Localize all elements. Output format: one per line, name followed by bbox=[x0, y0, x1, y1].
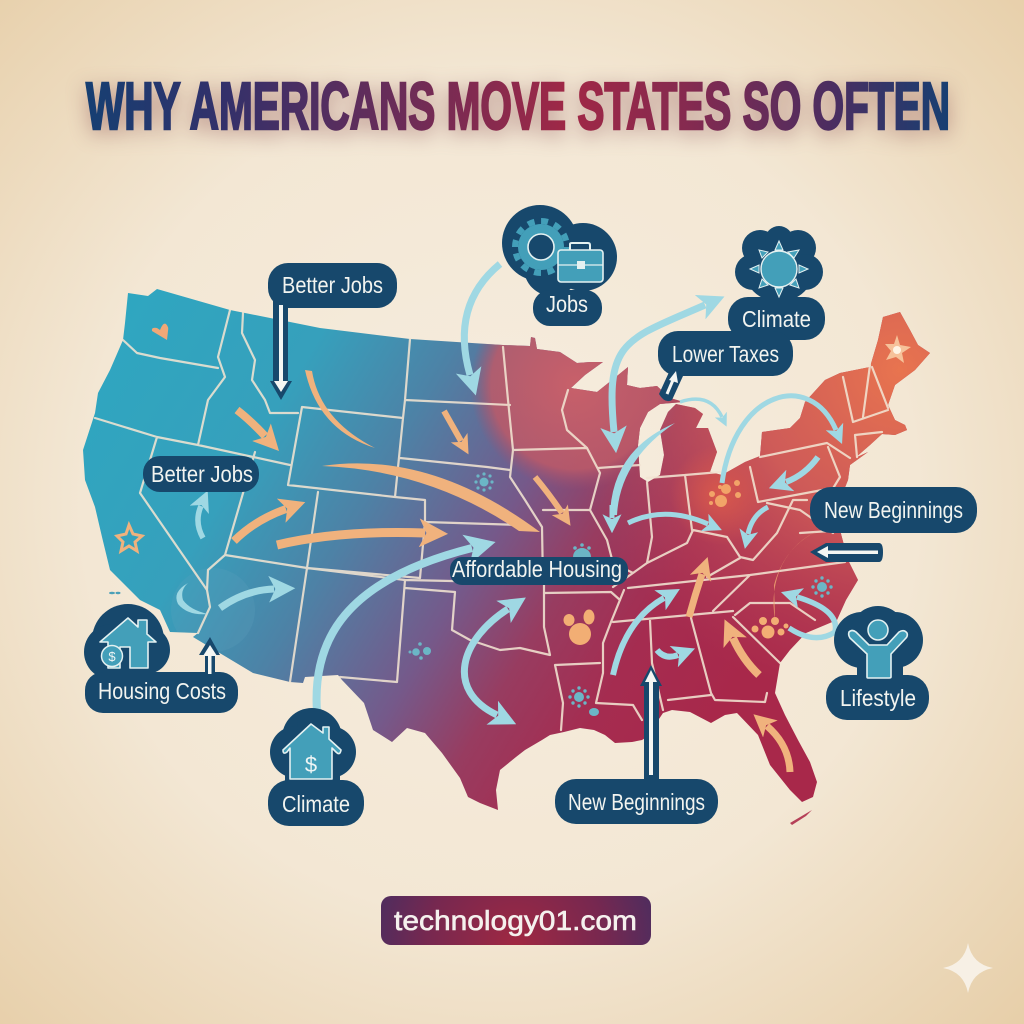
arrow: Midwest to Climate bbox=[612, 305, 705, 432]
callout: Better Jobs middle bbox=[143, 456, 259, 492]
arrow: South Dakota to Nebraska bbox=[444, 411, 461, 441]
callout: Climate top: Climate bbox=[742, 306, 811, 332]
Hawaii and Florida keys bbox=[109, 592, 812, 825]
callout: Better Jobs top: Better Jobs bbox=[282, 272, 383, 298]
footer website badge bbox=[381, 896, 651, 945]
teal flower: Nebraska bbox=[474, 472, 494, 492]
arrow: from Jobs icon bbox=[464, 264, 500, 375]
arrow: Florida bbox=[767, 726, 790, 772]
arrow: Idaho to Wyoming bbox=[237, 410, 265, 436]
arrow: Nevada up bbox=[198, 506, 203, 538]
callout: Housing Costs: Housing Costs bbox=[98, 678, 226, 704]
callout: New Beginnings bottom bbox=[555, 665, 718, 824]
icon: house with coin bbox=[100, 618, 156, 668]
arrow: Georgia bbox=[733, 638, 759, 675]
icon: house with dollar: $ bbox=[305, 752, 317, 777]
callout: Climate bottom: Climate bbox=[282, 791, 350, 817]
callout: Affordable Housing: Affordable Housing bbox=[452, 556, 622, 582]
callout: New Beginnings right: New Beginnings bbox=[824, 497, 963, 523]
arrow: Mississippi to Tennessee bbox=[613, 598, 664, 675]
arrow: Iowa to Missouri bbox=[535, 477, 562, 513]
callout: Better Jobs top bbox=[268, 263, 397, 400]
arrow: Alabama small bbox=[657, 650, 678, 657]
sparkle mark bbox=[943, 943, 993, 993]
callout: Jobs bbox=[502, 205, 617, 326]
arrow: Virginia crescent bbox=[774, 530, 820, 620]
arrow: Pennsylvania bbox=[786, 457, 818, 482]
arrow: New Beginnings pointer bbox=[810, 543, 883, 562]
teal flower: Louisiana bbox=[568, 686, 599, 716]
star: California bbox=[117, 525, 142, 551]
callout: Housing Costs bbox=[84, 604, 238, 713]
arrow: Lifestyle to North Carolina bbox=[789, 597, 836, 638]
arrow: West Virginia bbox=[748, 507, 768, 534]
icon: person with raised arms bbox=[849, 620, 907, 678]
callout: Lower Taxes bbox=[658, 331, 793, 401]
arrow: Arizona to New Mexico bbox=[220, 589, 274, 608]
icon: sun bbox=[750, 241, 808, 297]
arrow: Montana crescent bbox=[305, 370, 375, 448]
arrow: Michigan curve bbox=[680, 399, 722, 417]
callout: New Beginnings right bbox=[810, 487, 977, 533]
callout: Lower Taxes: Lower Taxes bbox=[672, 341, 779, 367]
paw dots: Arkansas bbox=[564, 610, 594, 645]
icon: house with coin: $ bbox=[108, 649, 116, 664]
arrow: Wyoming to Kansas bbox=[322, 463, 540, 532]
callout: Jobs: Jobs bbox=[546, 291, 588, 317]
teal flower: North Carolina bbox=[811, 576, 833, 598]
arrow: Utah to Colorado bbox=[234, 509, 286, 541]
callout: New Beginnings bottom: New Beginnings bbox=[568, 789, 705, 815]
arrow: Illinois to Ohio bbox=[628, 514, 708, 524]
callout: Lifestyle bbox=[826, 606, 929, 720]
migration arrows: orange bbox=[234, 370, 820, 772]
teal flower: Missouri bbox=[573, 543, 591, 557]
arrow: Texas double bbox=[464, 609, 508, 715]
footer website badge: technology01.com bbox=[394, 905, 637, 936]
callout: Climate bottom bbox=[268, 708, 364, 826]
arrow: Michigan to Illinois bbox=[610, 423, 675, 515]
map fill bbox=[83, 289, 930, 810]
arrow: Colorado to Kansas bbox=[277, 532, 425, 545]
callout: Lifestyle: Lifestyle bbox=[840, 685, 916, 711]
heart: Washington bbox=[152, 324, 168, 340]
map of the United States bbox=[83, 289, 930, 825]
arrow: from Climate icon bbox=[317, 548, 472, 712]
paw dots: South Carolina bbox=[752, 617, 788, 638]
migration arrows: teal bbox=[198, 264, 836, 715]
icon: gear bbox=[515, 221, 567, 273]
arrow: Alabama to Tennessee bbox=[689, 574, 702, 617]
teal dots: New Mexico bbox=[408, 642, 431, 660]
star: Maine bbox=[885, 335, 911, 363]
callout: Climate top bbox=[728, 226, 825, 340]
arrow: Ohio to New York bbox=[722, 396, 836, 483]
crescent: Nevada bbox=[176, 583, 208, 614]
state borders bbox=[95, 310, 888, 730]
paw dots: Ohio bbox=[709, 480, 741, 507]
icon: briefcase bbox=[558, 243, 603, 282]
callout: Better Jobs middle: Better Jobs bbox=[151, 461, 253, 487]
